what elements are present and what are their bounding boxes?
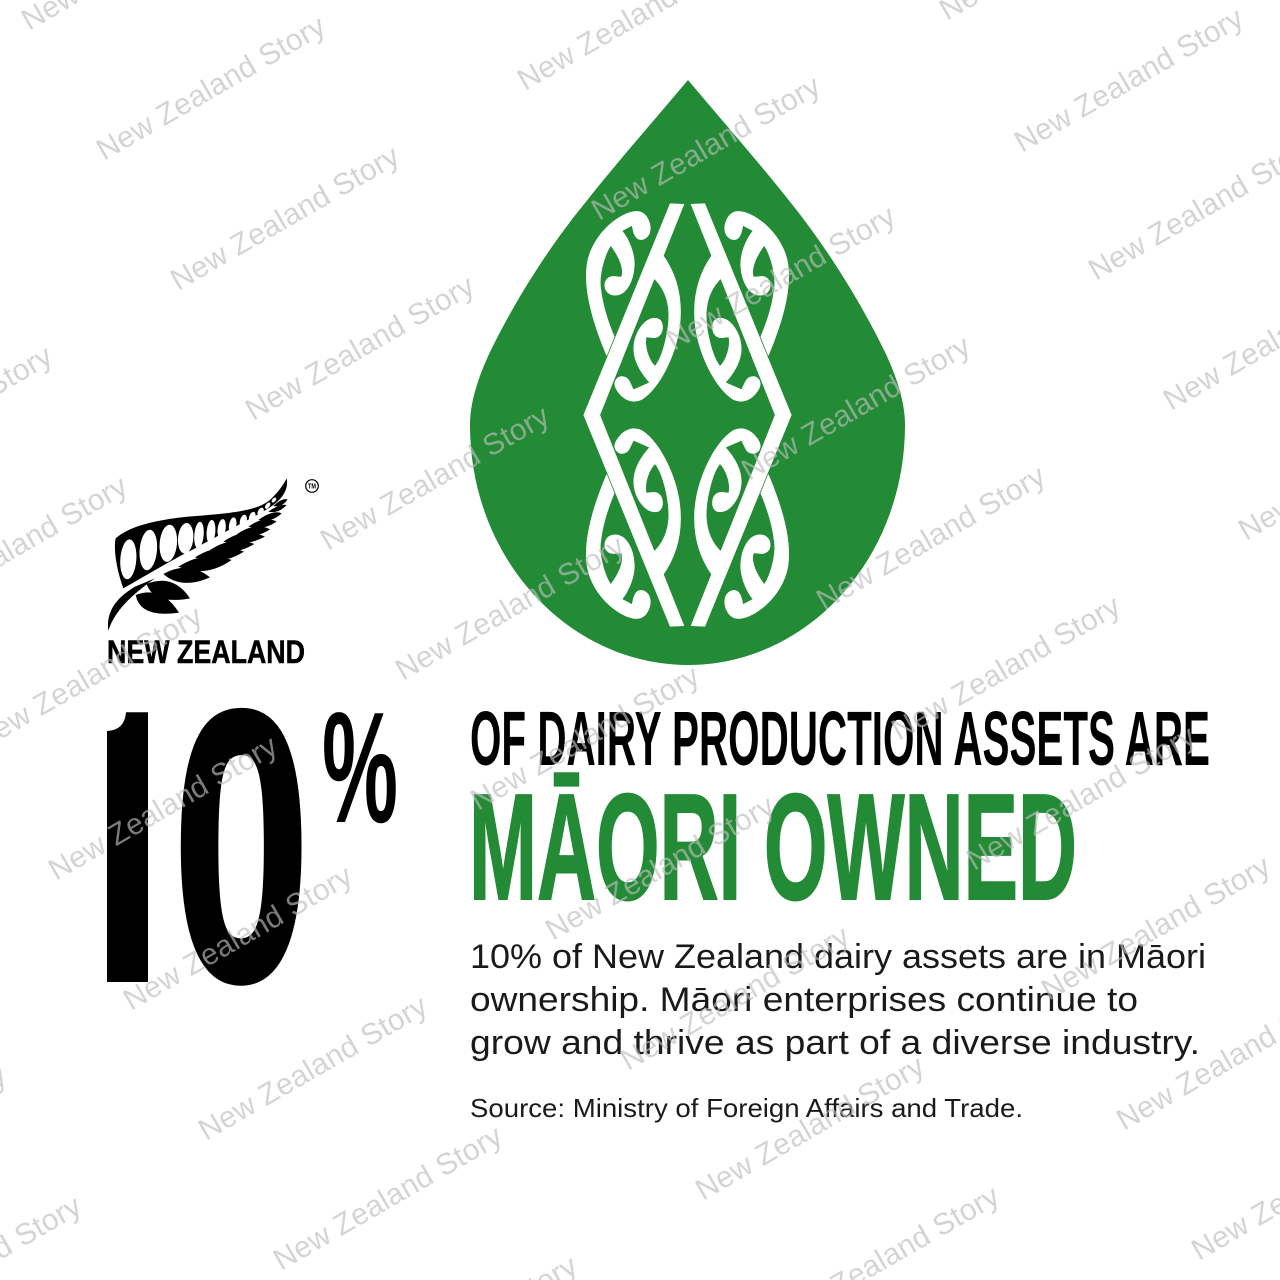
watermark layer: New Zealand Story xyxy=(586,69,826,227)
watermark layer: New Zealand Story xyxy=(736,329,976,487)
trademark symbol xyxy=(306,480,318,492)
digit 1: 1 xyxy=(10,628,228,1066)
watermark layer: New Zealand Story xyxy=(661,199,901,357)
watermark layer: New Zealand Story xyxy=(1036,849,1276,1007)
percent sign: % xyxy=(322,680,398,856)
big stat: 10% xyxy=(10,628,398,1066)
drop shape xyxy=(470,80,905,665)
logo wordmark: NEW ZEALAND xyxy=(107,634,305,670)
New Zealand fern logo xyxy=(107,478,318,670)
watermark layer: New Zealand Story xyxy=(961,719,1201,877)
trademark symbol: TM xyxy=(308,484,316,491)
body paragraph: grow and thrive as part of a diverse industry. xyxy=(470,1024,1200,1062)
watermark layer: New Zealand Story xyxy=(268,1119,508,1277)
watermark layer: New Zealand Story xyxy=(390,529,630,687)
body paragraph: ownership. Māori enterprises continue to xyxy=(470,981,1138,1019)
watermark layer: New Zealand Story xyxy=(615,919,855,1077)
watermark layer: New Zealand Story xyxy=(315,399,555,557)
digit 0: 0 xyxy=(173,632,310,1061)
watermark layer: New Zealand Story xyxy=(690,1049,930,1207)
watermark layer: New Zealand Story xyxy=(811,459,1051,617)
watermark layer: New Zealand Story xyxy=(465,659,705,817)
source note: Source: Ministry of Foreign Affairs and Trade. xyxy=(470,1093,1023,1123)
watermark layer: New Zealand Story xyxy=(240,269,480,427)
body paragraph: 10% of New Zealand dairy assets are in Māori xyxy=(470,938,1206,976)
watermark layer: New Zealand Story xyxy=(165,139,405,297)
watermark layer: New Zealand Story xyxy=(91,9,331,167)
koru pattern xyxy=(583,203,792,627)
silver fern xyxy=(108,478,288,631)
body paragraph xyxy=(470,938,1206,1062)
watermark layer: New Zealand Story xyxy=(540,789,780,947)
watermark layer: New Zealand Story xyxy=(193,989,433,1147)
green water drop with Māori pattern xyxy=(470,80,905,665)
watermark layer: New Zealand Story xyxy=(1009,1,1249,159)
watermark layer: New Zealand Story xyxy=(886,589,1126,747)
watermark layer: New Zealand Story xyxy=(118,859,358,1017)
watermark layer: New Zealand Story xyxy=(43,729,283,887)
